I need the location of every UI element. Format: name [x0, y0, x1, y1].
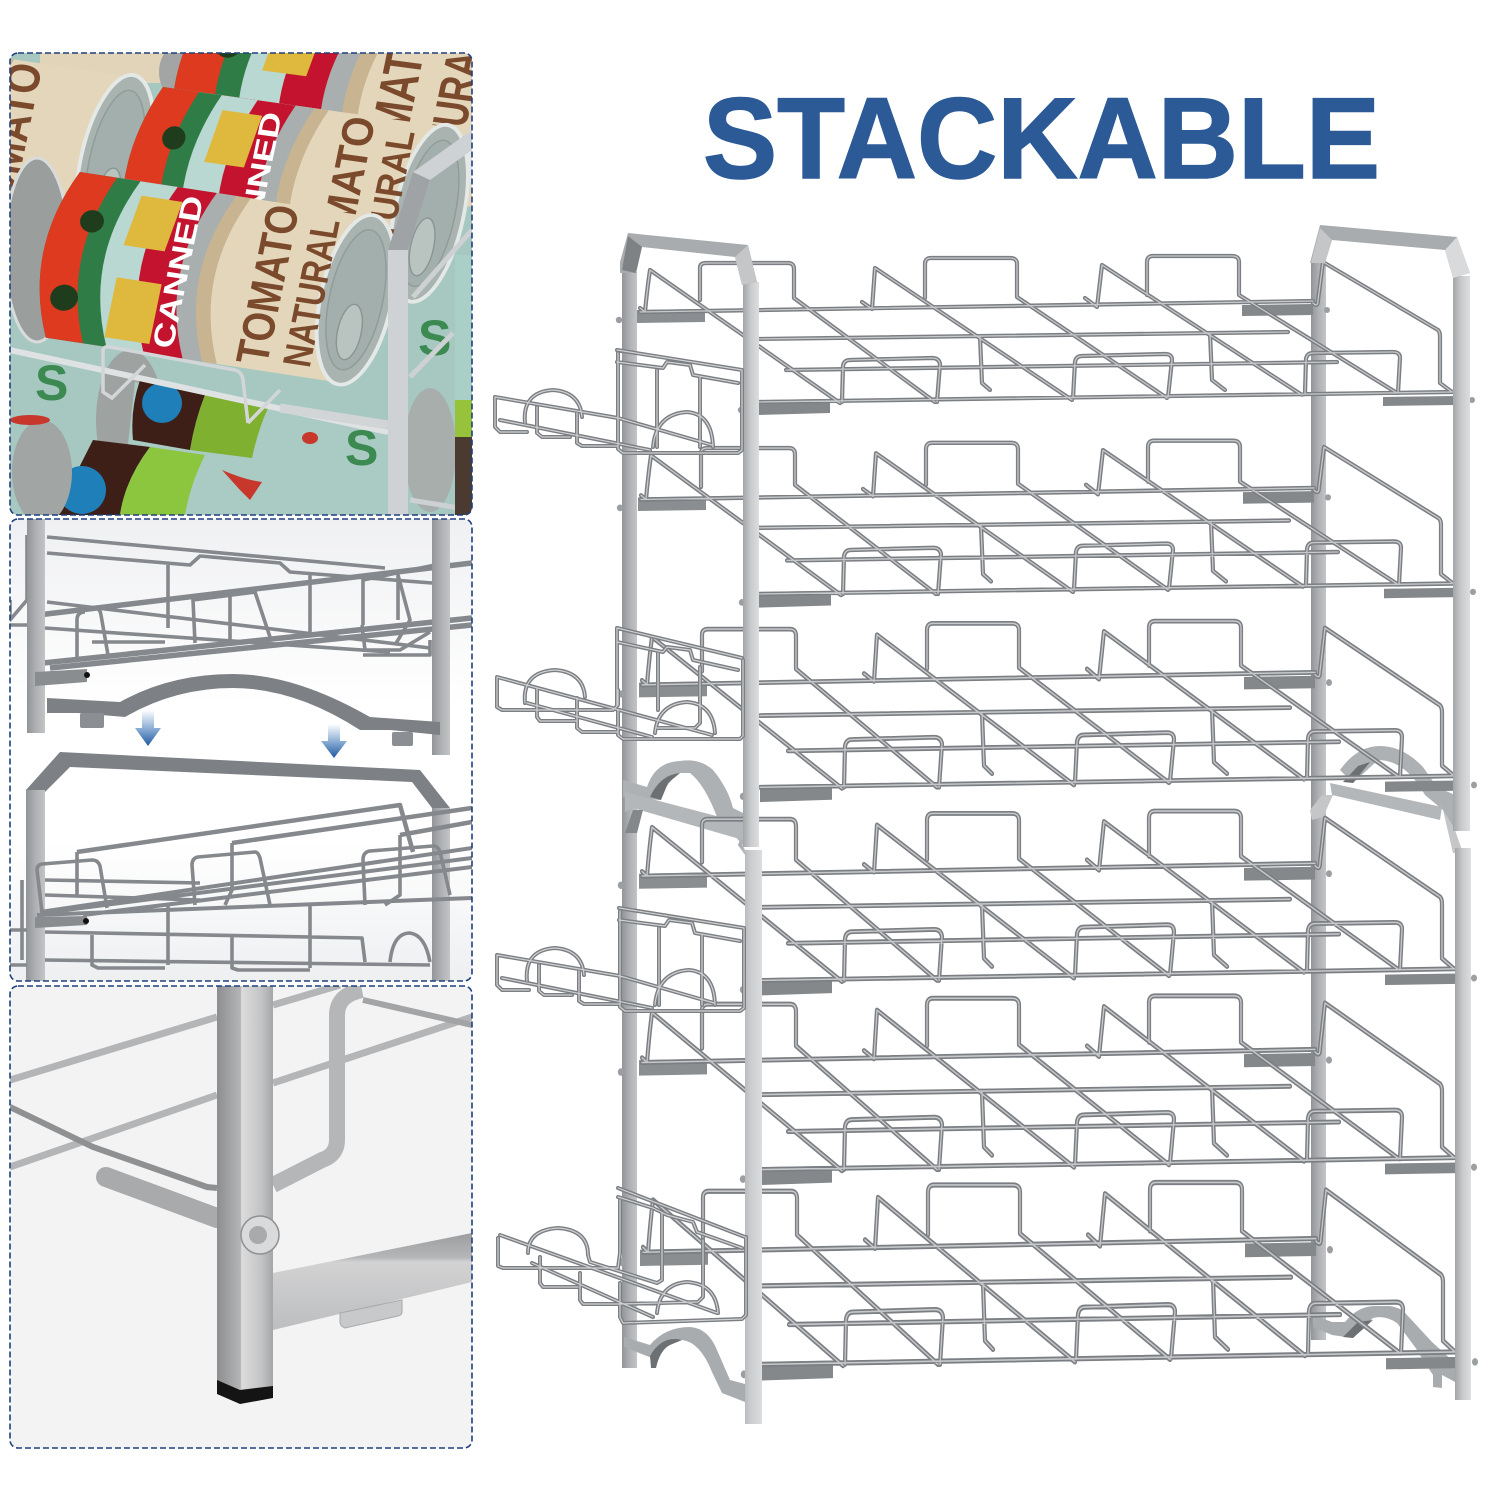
top left frame arch: [620, 233, 757, 285]
far left lid: [10, 156, 64, 344]
lower rack top frame: [26, 752, 450, 981]
panel: cans on the rack photo: S: [418, 310, 451, 366]
horizontal bar: [273, 1233, 472, 1330]
lower rack right top arch: [1310, 783, 1463, 853]
can: middle: NATURAL: [350, 128, 424, 287]
title: STACKABLE: [703, 75, 1380, 203]
arch base of upper rack: [47, 674, 440, 746]
can: front: [40, 172, 393, 386]
wire loop: [273, 990, 362, 1185]
end rack: tier 4: [497, 908, 744, 1011]
front uprights: [738, 276, 1471, 1424]
top right frame arch: [1310, 225, 1470, 278]
lower rack wires: [10, 805, 472, 970]
upper rack wires: [10, 535, 472, 668]
can: middle: [124, 87, 470, 304]
end rack: tier 1: [495, 350, 742, 453]
end rack: tier 6: [498, 1188, 746, 1323]
shelf 2: [617, 441, 1476, 608]
can: middle: TOMATO: [304, 113, 385, 283]
bottom right base arch: [1313, 1306, 1455, 1388]
lower tube: [106, 1177, 217, 1218]
shelf 6: [619, 1182, 1478, 1381]
middle left base arch: [623, 760, 743, 845]
can: front: CANNED: [147, 194, 211, 351]
lower row cans: [10, 381, 318, 515]
arrow: right down: [321, 724, 347, 758]
shelf 5: [618, 996, 1477, 1185]
panel: cans on the rack photo: S: [345, 420, 378, 476]
panel: cans on the rack photo: S: [35, 355, 68, 411]
upper rack legs: [27, 519, 450, 755]
can: back right: [174, 53, 472, 207]
screw: [241, 1216, 279, 1254]
end rack: tier 3: [497, 628, 743, 739]
shelf 1: [616, 256, 1475, 415]
can: back left: [10, 59, 154, 196]
lower rack tube: [35, 916, 89, 928]
leg: [217, 986, 273, 1404]
can: front: NATURAL: [275, 216, 349, 370]
middle right base arch: [1340, 746, 1455, 830]
can: middle: CANNED: [226, 110, 289, 268]
lower rack left top arch: [625, 792, 743, 840]
can: front: TOMATO: [227, 202, 310, 367]
rack wires and frame: [10, 130, 472, 515]
thin rails: [10, 985, 472, 1188]
panel: cans on the rack photo: [9, 52, 473, 516]
rear uprights: [622, 262, 1326, 1368]
shelf 4: [618, 811, 1477, 995]
bottom left base arch: [624, 1327, 745, 1402]
shelf 3: [618, 621, 1477, 802]
panel: stacking detail with arrows: [10, 519, 472, 981]
panel: leg and screw close-up: [10, 985, 472, 1448]
arrow: left down: [135, 710, 161, 746]
